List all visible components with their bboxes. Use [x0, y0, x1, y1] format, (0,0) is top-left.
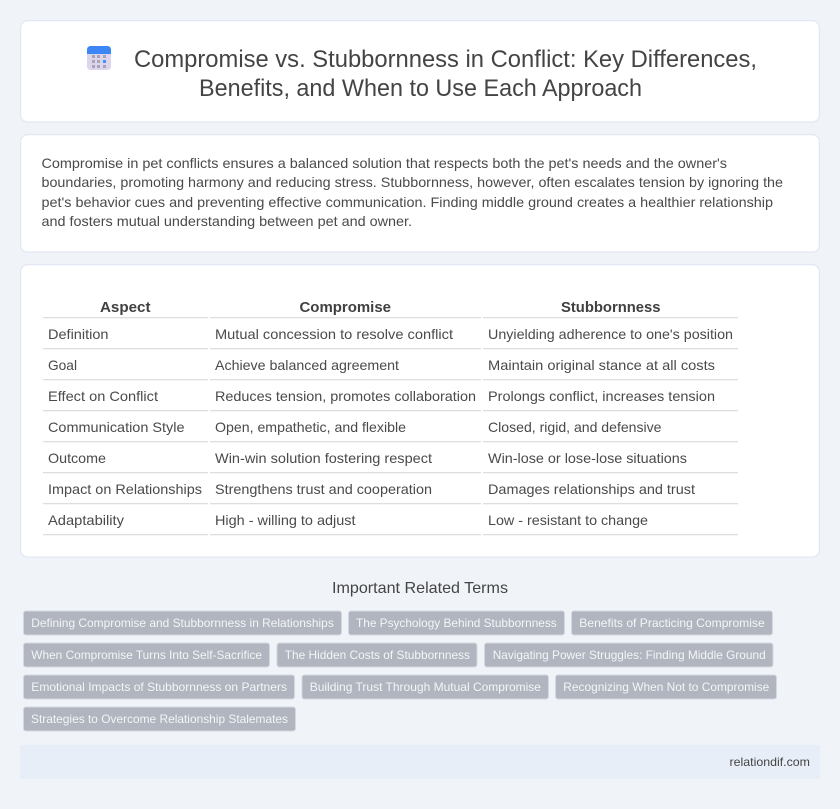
tag: Navigating Power Struggles: Finding Middle Ground: [493, 648, 766, 662]
table row: effect on conflict: Reduces tension, promotes collaboration: [215, 388, 476, 404]
tag: Building Trust Through Mutual Compromise: [310, 680, 541, 694]
panel: comparison table: [21, 265, 819, 557]
tag: [572, 611, 772, 635]
table row: effect on conflict: [43, 388, 738, 411]
table row: definition: Definition: [48, 326, 108, 342]
text block: introduction paragraph: [42, 155, 783, 229]
table row: communication style: Closed, rigid, and defensive: [488, 419, 662, 435]
table row: goal: Goal: [48, 357, 77, 373]
table row: outcome: [43, 450, 738, 473]
table row: adaptability: Low - resistant to change: [488, 512, 648, 528]
title: [134, 46, 757, 102]
tag: [24, 675, 294, 699]
tag: Benefits of Practicing Compromise: [579, 616, 765, 630]
table row: adaptability: Adaptability: [48, 512, 124, 528]
footer: [20, 745, 820, 779]
tag: Defining Compromise and Stubbornness in Relationships: [31, 616, 334, 630]
table row: definition: Unyielding adherence to one's position: [488, 326, 733, 342]
related terms tags: [24, 611, 776, 731]
tag: [24, 643, 270, 667]
table row: outcome: Win-win solution fostering respect: [215, 450, 432, 466]
table header row: Stubbornness: [561, 300, 660, 316]
table header row: Compromise: [300, 300, 391, 316]
tag: [556, 675, 776, 699]
table row: definition: [43, 326, 738, 349]
table row: goal: Achieve balanced agreement: [215, 357, 399, 373]
tag: The Psychology Behind Stubbornness: [356, 616, 557, 630]
table header row: Aspect: [100, 300, 151, 316]
tag: [24, 611, 342, 635]
tag: When Compromise Turns Into Self-Sacrifice: [31, 648, 262, 662]
tag: Recognizing When Not to Compromise: [563, 680, 770, 694]
tag: The Hidden Costs of Stubbornness: [285, 648, 470, 662]
table row: definition: Mutual concession to resolve conflict: [215, 326, 453, 342]
text block: introduction paragraph: Compromise in pet conflicts ensures a balanced solution that respects both the pet's needs and the owner's: [42, 155, 727, 171]
table row: goal: Maintain original stance at all costs: [488, 357, 715, 373]
table row: communication style: Open, empathetic, and flexible: [215, 419, 406, 435]
text block: introduction paragraph: and fosters mutual understanding between pet and owner.: [42, 213, 412, 229]
table row: impact on relationships: Strengthens trust and cooperation: [215, 481, 432, 497]
table row: impact on relationships: Impact on Relationships: [48, 481, 202, 497]
title: Benefits, and When to Use Each Approach: [199, 75, 642, 102]
table row: communication style: [43, 419, 738, 442]
panel: introduction: [21, 135, 819, 252]
table row: outcome: Win-lose or lose-lose situations: [488, 450, 687, 466]
table row: impact on relationships: [43, 481, 738, 504]
table row: adaptability: High - willing to adjust: [215, 512, 356, 528]
tag: Emotional Impacts of Stubbornness on Partners: [31, 680, 287, 694]
table row: adaptability: [43, 512, 738, 535]
table row: goal: [43, 357, 738, 380]
tag: [302, 675, 548, 699]
heading: important related terms: Important Related Terms: [332, 580, 508, 597]
title: Compromise vs. Stubbornness in Conflict: Key Differences,: [134, 46, 757, 73]
table row: effect on conflict: Effect on Conflict: [48, 388, 158, 404]
text block: introduction paragraph: boundaries, promoting harmony and reducing stress. Stubbornness, however, often escalates tension by ignoring the: [42, 174, 783, 190]
tag: [277, 643, 477, 667]
tag: [348, 611, 564, 635]
panel: header: [21, 21, 819, 122]
tag: [484, 643, 773, 667]
footer: relationdif.com: [730, 755, 810, 769]
table row: communication style: Communication Style: [48, 419, 185, 435]
text block: introduction paragraph: pet's behavior cues and preventing effective communication. Finding middle ground creates a healthier relationship: [42, 194, 773, 210]
table row: effect on conflict: Prolongs conflict, increases tension: [488, 388, 715, 404]
icon: calendar: [87, 46, 111, 70]
table row: outcome: Outcome: [48, 450, 106, 466]
tag: Strategies to Overcome Relationship Stalemates: [31, 712, 288, 726]
table row: impact on relationships: Damages relationships and trust: [488, 481, 695, 497]
table header row: [43, 300, 738, 318]
tag: [24, 707, 296, 731]
